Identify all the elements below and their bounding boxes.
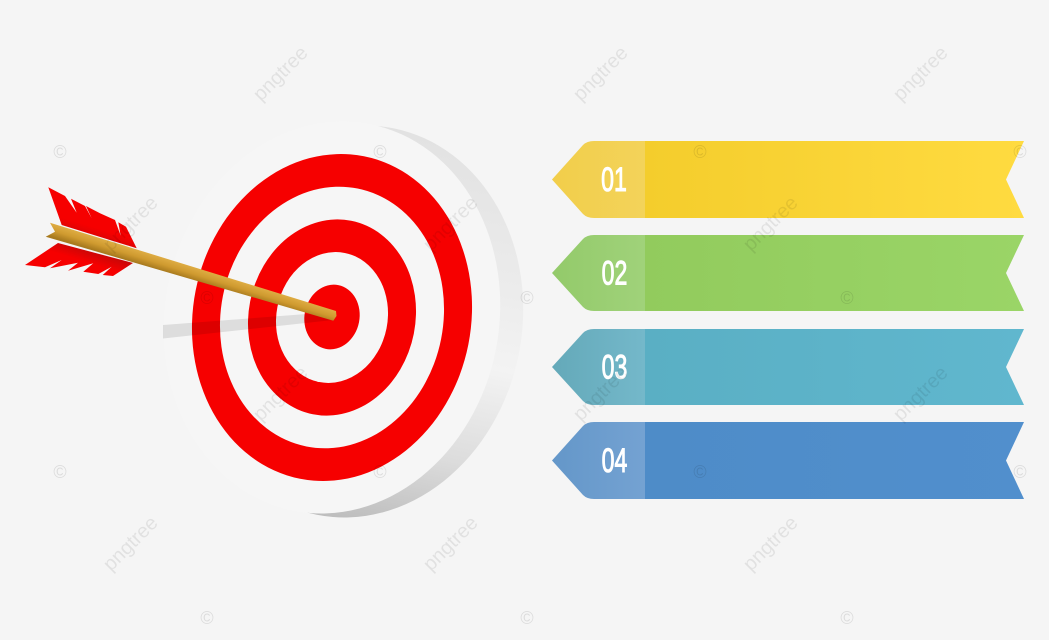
arrow shadow xyxy=(163,313,333,338)
watermarks: © xyxy=(840,608,854,628)
outer red ring xyxy=(164,129,500,506)
watermarks: pngtree xyxy=(99,192,163,256)
yellow arrow tab xyxy=(552,141,645,218)
number 02: 02 xyxy=(602,255,627,293)
watermarks: © xyxy=(840,288,854,308)
bullseye xyxy=(299,280,365,354)
teal ribbon body xyxy=(645,329,1024,405)
number 04: 04 xyxy=(602,443,627,480)
yellow ribbon body xyxy=(645,141,1024,218)
inner white ring xyxy=(265,242,399,393)
watermarks: © xyxy=(200,288,214,308)
watermarks: pngtree xyxy=(889,362,953,426)
watermarks: © xyxy=(200,608,214,628)
lower fletching xyxy=(25,243,133,276)
watermarks: © xyxy=(53,142,67,162)
board side edge xyxy=(153,96,557,547)
banner 04 xyxy=(552,422,1024,499)
watermarks: © xyxy=(373,462,387,482)
number 01: 01 xyxy=(601,162,627,199)
watermarks: © xyxy=(693,142,707,162)
teal arrow tab xyxy=(552,329,645,405)
banner 03 xyxy=(552,329,1024,405)
watermarks: © xyxy=(53,462,67,482)
target board xyxy=(130,92,557,547)
arrow xyxy=(25,187,336,321)
watermarks: pngtree xyxy=(249,42,313,106)
watermarks: © xyxy=(693,462,707,482)
blue ribbon body xyxy=(645,422,1024,499)
blue arrow tab xyxy=(552,422,645,499)
watermarks: pngtree xyxy=(889,42,953,106)
watermarks: © xyxy=(1013,462,1027,482)
watermarks: pngtree xyxy=(249,362,313,426)
watermarks: pngtree xyxy=(569,42,633,106)
green arrow tab xyxy=(552,235,645,311)
watermarks: pngtree xyxy=(739,512,803,576)
watermarks: pngtree xyxy=(739,192,803,256)
outer white ring xyxy=(197,167,467,468)
watermarks: © xyxy=(520,608,534,628)
watermarks: pngtree xyxy=(419,192,483,256)
green ribbon body xyxy=(645,235,1024,311)
watermarks: pngtree xyxy=(569,362,633,426)
board face xyxy=(130,92,534,543)
watermarks: pngtree xyxy=(99,512,163,576)
watermarks: © xyxy=(1013,142,1027,162)
watermarks: pngtree xyxy=(419,512,483,576)
banner 02 xyxy=(552,235,1024,311)
banner 01 xyxy=(552,141,1024,218)
arrow shaft xyxy=(46,223,336,321)
watermarks: © xyxy=(373,142,387,162)
inner red ring xyxy=(231,205,433,430)
number 03: 03 xyxy=(602,349,627,387)
watermarks: © xyxy=(520,288,534,308)
upper fletching xyxy=(48,187,137,248)
